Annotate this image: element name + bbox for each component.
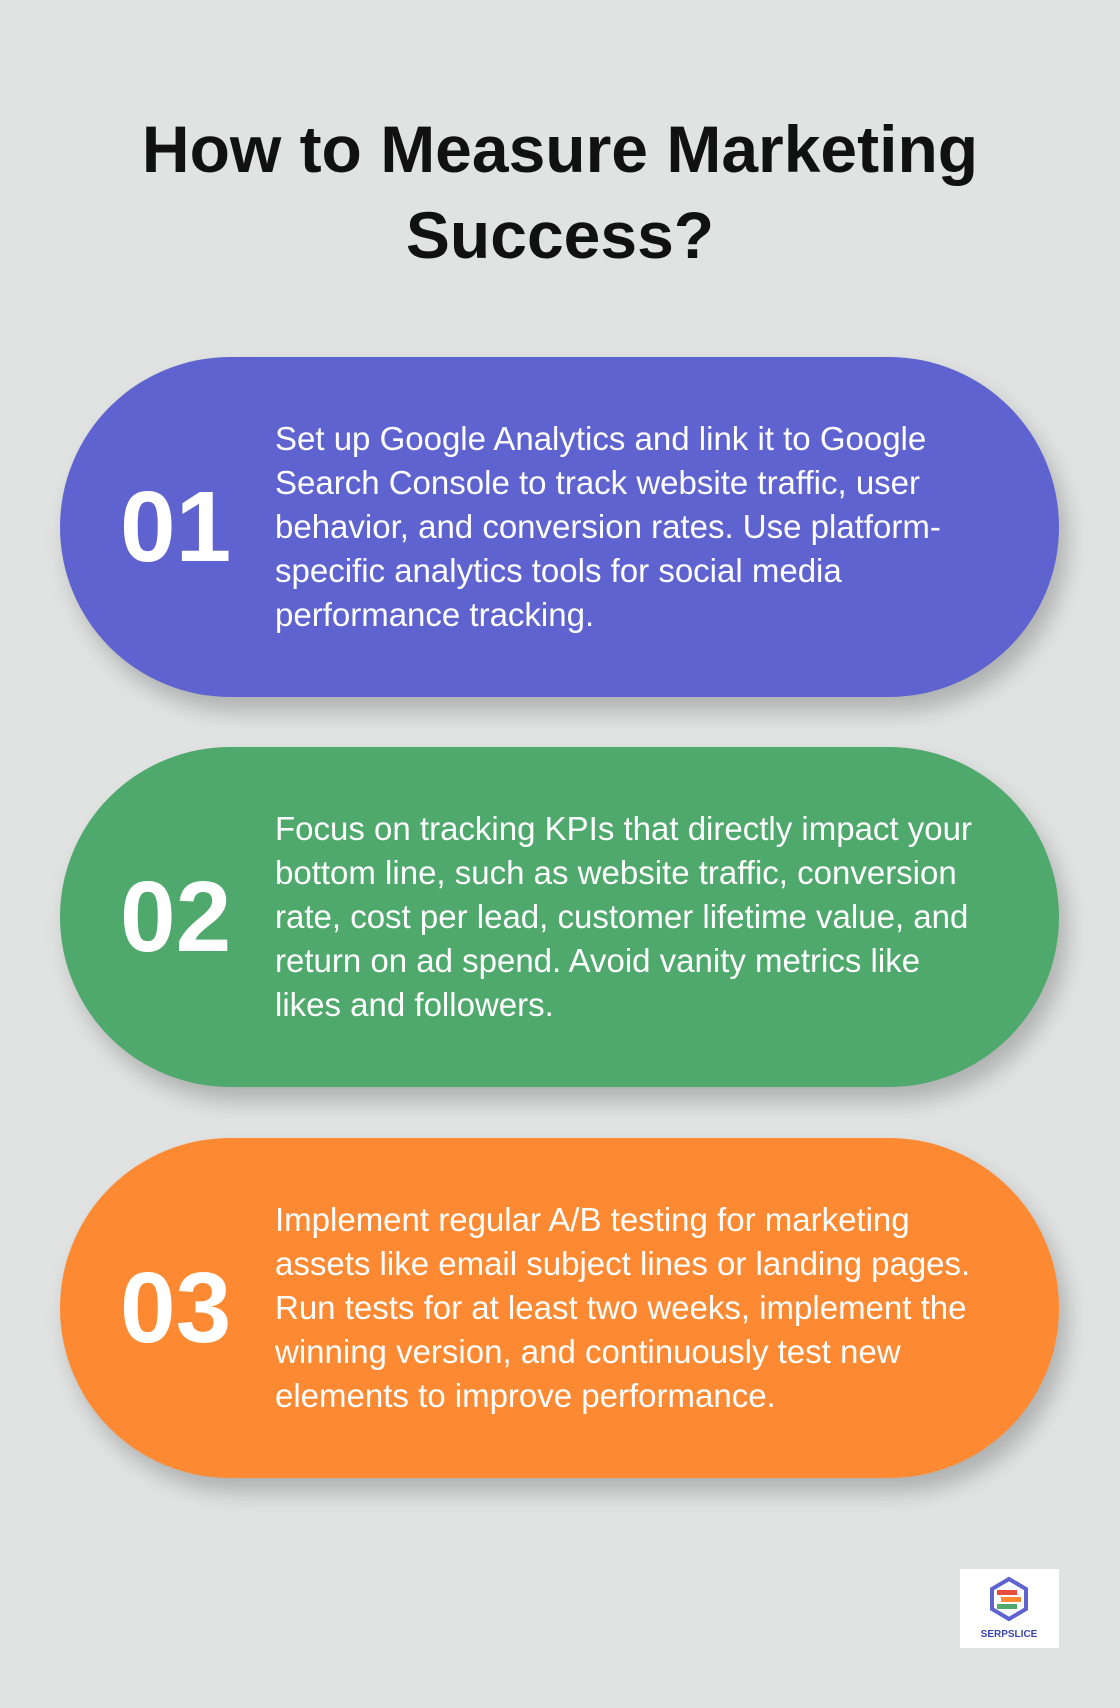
text: step 01: Set up Google Analytics and link it to Google	[275, 420, 926, 457]
text: step 03	[275, 1201, 970, 1414]
text: step 02: likes and followers.	[275, 986, 554, 1023]
text: step 02: Focus on tracking KPIs that directly impact your	[275, 810, 972, 847]
title: How to Measure Marketing	[142, 112, 978, 186]
panel: step 03	[60, 1138, 1059, 1478]
text: step 03: assets like email subject lines or landing pages.	[275, 1245, 970, 1282]
text: step 01: Search Console to track website traffic, user	[275, 464, 920, 501]
text: step 03: winning version, and continuously test new	[275, 1333, 901, 1370]
text: step 01: performance tracking.	[275, 596, 594, 633]
text: step 03: Run tests for at least two weeks, implement the	[275, 1289, 966, 1326]
number 01: 01	[120, 471, 231, 583]
title	[142, 112, 978, 272]
logo: SERPSLICE	[981, 1629, 1038, 1640]
panel: step 01	[60, 357, 1059, 697]
text: step 02: return on ad spend. Avoid vanity metrics like	[275, 942, 920, 979]
text: step 03: elements to improve performance.	[275, 1377, 776, 1414]
panel: step 02	[60, 747, 1059, 1087]
text: step 03: Implement regular A/B testing for marketing	[275, 1201, 910, 1238]
text: step 02: bottom line, such as website traffic, conversion	[275, 854, 957, 891]
text: step 01	[275, 420, 941, 633]
number 02: 02	[120, 861, 231, 973]
text: step 01: specific analytics tools for social media	[275, 552, 842, 589]
text: step 02: rate, cost per lead, customer lifetime value, and	[275, 898, 968, 935]
title: Success?	[406, 198, 714, 272]
logo	[960, 1569, 1059, 1648]
number 03: 03	[120, 1252, 231, 1364]
text: step 01: behavior, and conversion rates. Use platform-	[275, 508, 941, 545]
text: step 02	[275, 810, 972, 1023]
